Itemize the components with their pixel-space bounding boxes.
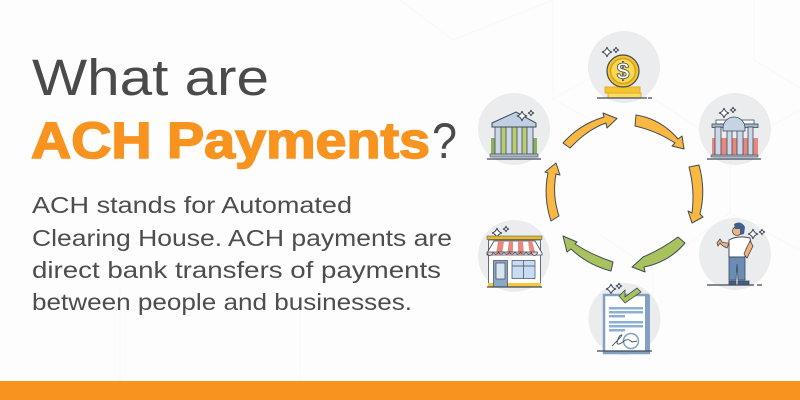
icon: person thumbs up [699,218,771,290]
footer bar [0,381,800,400]
description text: Clearing House. ACH payments are [32,225,452,251]
description text: direct bank transfers of payments [32,257,441,283]
cycle arrows [545,113,703,272]
icon: storefront [478,220,550,292]
icon: left bank building [478,93,550,165]
icon: right bank building [699,93,771,165]
arrow: left bank to coin [563,113,617,148]
arrow: right bank to person [688,165,703,223]
title: ACH Payments?: ? [432,113,457,169]
description text [32,192,452,315]
description text: between people and businesses. [32,289,412,315]
icon: coin stack: $ [617,58,630,84]
arrow: coin to right bank [635,115,684,149]
icon: contract document [588,283,660,355]
title: What are: What are [32,49,269,106]
icon: coin stack [588,31,660,103]
arrow: person to document [632,237,685,272]
title: ACH Payments?: ACH Payments [31,112,430,169]
description text: ACH stands for Automated [32,192,352,218]
arrow: store to left bank [545,163,560,221]
arrow: document to store [563,236,613,271]
